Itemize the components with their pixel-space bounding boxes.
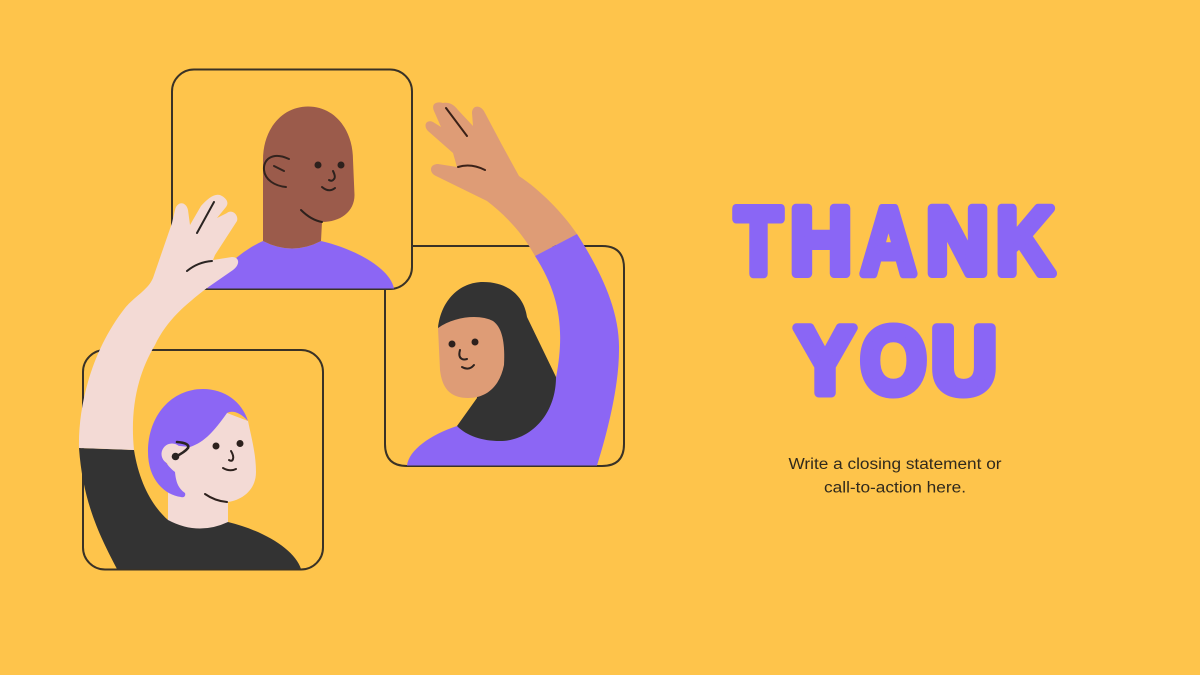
raised arm skin and hand bbox=[79, 195, 238, 450]
hijab bbox=[438, 282, 556, 441]
title line: you: U bbox=[931, 308, 997, 414]
frame: right person bbox=[385, 246, 624, 466]
person: right, hijab with raised arm bbox=[407, 102, 619, 466]
title: thank you bbox=[735, 188, 1054, 414]
facial features bbox=[448, 338, 478, 369]
purple sleeve and body bbox=[407, 234, 619, 466]
person: bottom-left, purple hair with raised arm bbox=[79, 195, 301, 569]
title line: thank: A bbox=[861, 188, 916, 294]
hand creases bbox=[446, 108, 485, 170]
ear bbox=[264, 156, 289, 187]
title line: thank: T bbox=[735, 188, 782, 294]
ear bbox=[162, 444, 182, 464]
closing statement: call-to-action here. bbox=[824, 480, 966, 496]
person: top, brown skin bbox=[207, 106, 394, 288]
title line: thank: H bbox=[790, 188, 852, 294]
closing statement: Write a closing statement or bbox=[788, 456, 1002, 473]
title line: you: O bbox=[860, 308, 926, 414]
closing statement bbox=[788, 456, 1002, 496]
face bbox=[438, 317, 504, 398]
ear detail bbox=[172, 442, 188, 460]
head and neck bbox=[263, 106, 354, 248]
frame: bottom-left person bbox=[83, 350, 323, 570]
frame: top person bbox=[172, 70, 412, 289]
purple hair bbox=[148, 389, 248, 497]
illustration: three waving people in frames bbox=[79, 70, 624, 570]
title line: thank: K bbox=[996, 188, 1054, 294]
shirt bbox=[207, 241, 394, 288]
black top bbox=[79, 448, 301, 569]
facial features bbox=[205, 440, 244, 502]
face bbox=[301, 162, 344, 222]
hand creases bbox=[187, 202, 214, 271]
title line: thank: N bbox=[926, 188, 989, 294]
title line: you: Y bbox=[795, 308, 855, 414]
face bbox=[165, 413, 256, 502]
neck bbox=[168, 490, 228, 530]
raised arm skin and hand bbox=[426, 102, 577, 256]
